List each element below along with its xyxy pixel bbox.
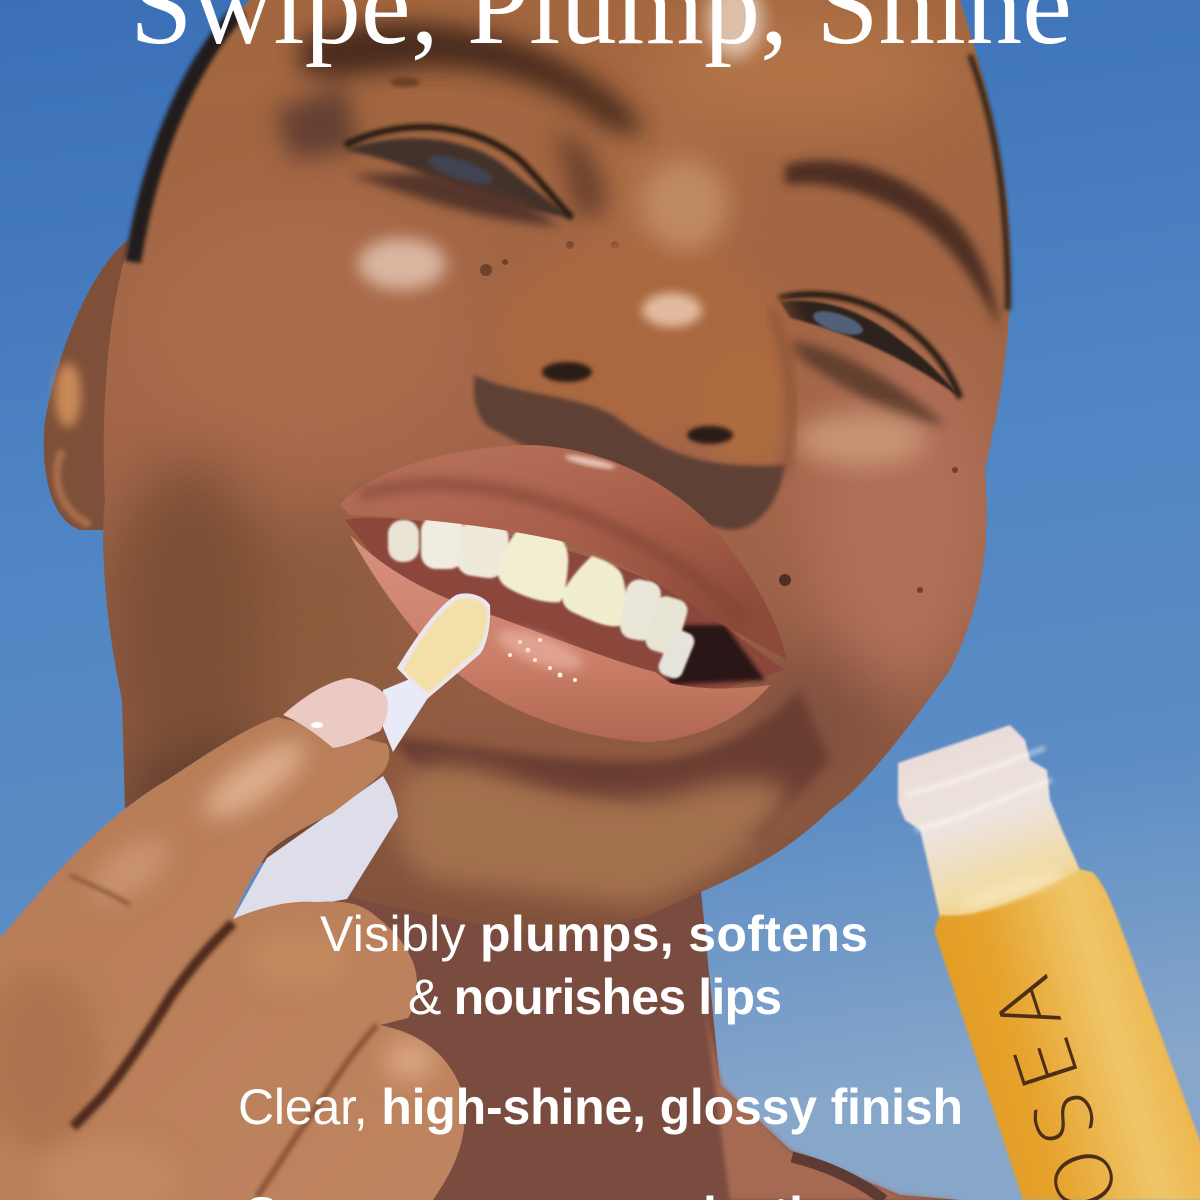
lip oil bottle [898,725,1200,1200]
chin shadow and sunlit chin [385,690,830,905]
nostrils [542,362,733,444]
mouth [340,445,787,742]
ear [44,240,128,530]
finger shading [0,729,435,1200]
nose [490,160,791,470]
hair at left and right temples [133,10,1008,310]
forehead sheen [707,0,763,58]
finger creases [70,875,377,1197]
face [103,0,1010,925]
benefit text: plumps softens nourishes: & nourishes lips [408,969,782,1025]
benefit text: plumps softens nourishes [320,906,868,1025]
soft skin tones [105,15,990,850]
lower lip [350,535,770,742]
left eye [345,127,572,226]
teeth [388,516,697,681]
benefit text: clear finish: Clear, high-shine, glossy finish [238,1079,963,1135]
shadow under nose [474,375,785,530]
bottle neck [898,725,1100,950]
applicator tip [397,593,490,699]
lip oil applicator [233,593,490,919]
upper lip [340,445,787,660]
applicator stem [383,672,433,752]
hand [0,678,465,1200]
benefit text: plumps softens nourishes: Visibly plumps, softens [320,906,868,962]
left brow [275,22,645,215]
applicator handle [233,776,398,919]
left cheek highlight and freckles [350,76,619,300]
right eye [778,294,960,425]
bottle body [935,870,1200,1200]
right cheek highlight and freckles [779,414,958,593]
right brow [785,160,1000,330]
thumb nail [283,678,388,748]
neck and shoulder [300,880,960,1200]
